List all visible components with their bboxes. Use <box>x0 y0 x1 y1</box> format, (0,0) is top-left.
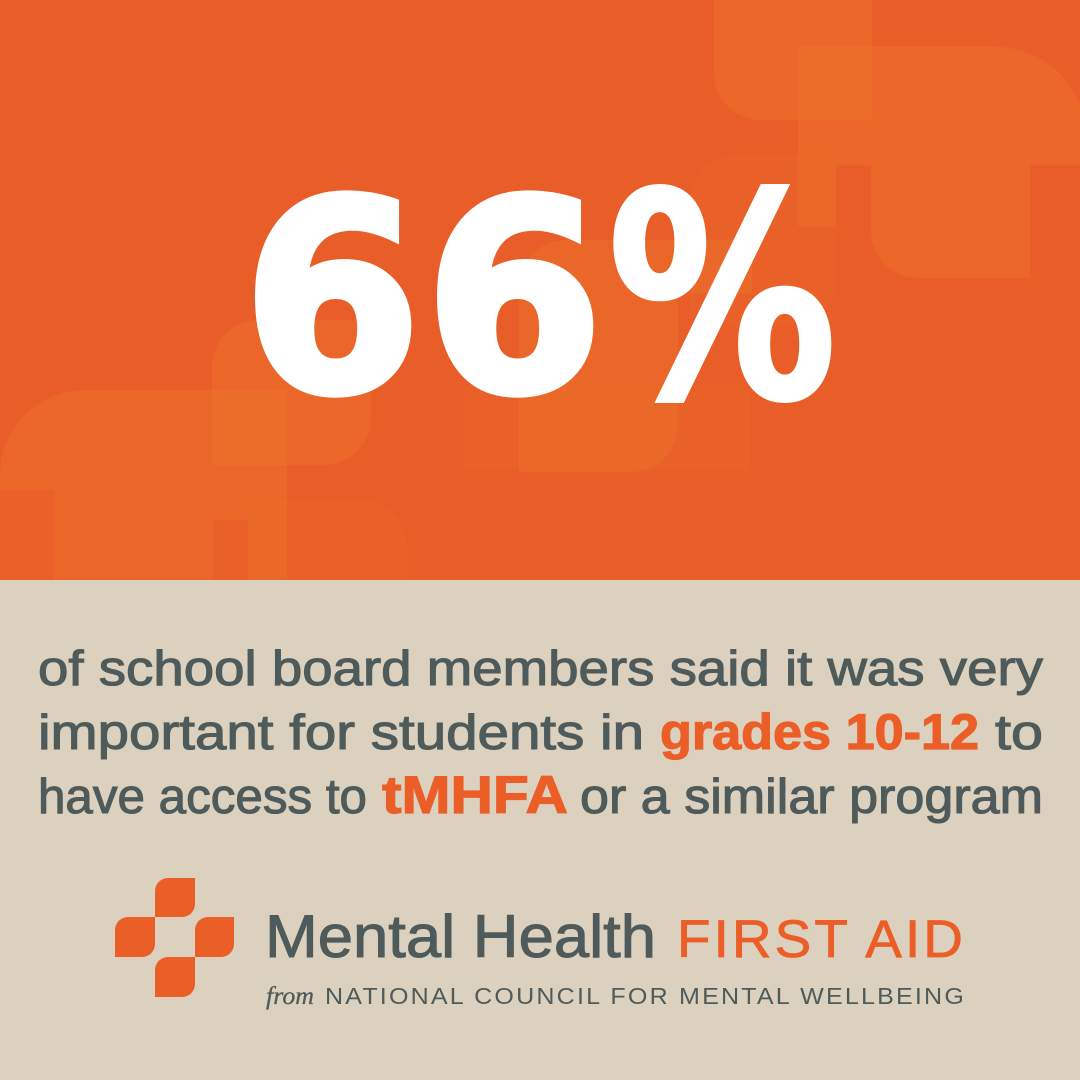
text: National Council attribution: from <box>266 983 314 1010</box>
heading: 66 percent statistic <box>243 133 837 464</box>
heading: 66 percent statistic: 6 <box>243 146 421 453</box>
heading: 66 percent statistic: % <box>608 133 837 464</box>
text block: description of the statistic: grades 10-12 <box>660 704 979 760</box>
text block: description of the statistic: have access to <box>38 770 367 824</box>
text block: description of the statistic: or a similar program <box>580 770 1043 824</box>
heading: 66 percent statistic: 6 <box>425 146 603 453</box>
panel: beige text background <box>0 580 1080 1080</box>
panel: orange statistic background <box>0 0 1080 580</box>
icon: Mental Health First Aid cross logo <box>115 878 234 997</box>
text: Mental Health First Aid wordmark <box>265 903 966 970</box>
text block: description of the statistic: tMHFA <box>382 766 568 825</box>
text block: description of the statistic: to <box>995 706 1043 760</box>
text: National Council attribution: NATIONAL COUNCIL FOR MENTAL WELLBEING <box>325 983 966 1009</box>
text: Mental Health First Aid wordmark: FIRST AID <box>677 910 966 969</box>
text block: description of the statistic <box>38 642 1044 825</box>
text block: description of the statistic: of school board members said it was very <box>38 642 1044 696</box>
text: Mental Health First Aid wordmark: Mental Health <box>265 903 656 970</box>
text block: description of the statistic: important for students in <box>38 706 644 760</box>
